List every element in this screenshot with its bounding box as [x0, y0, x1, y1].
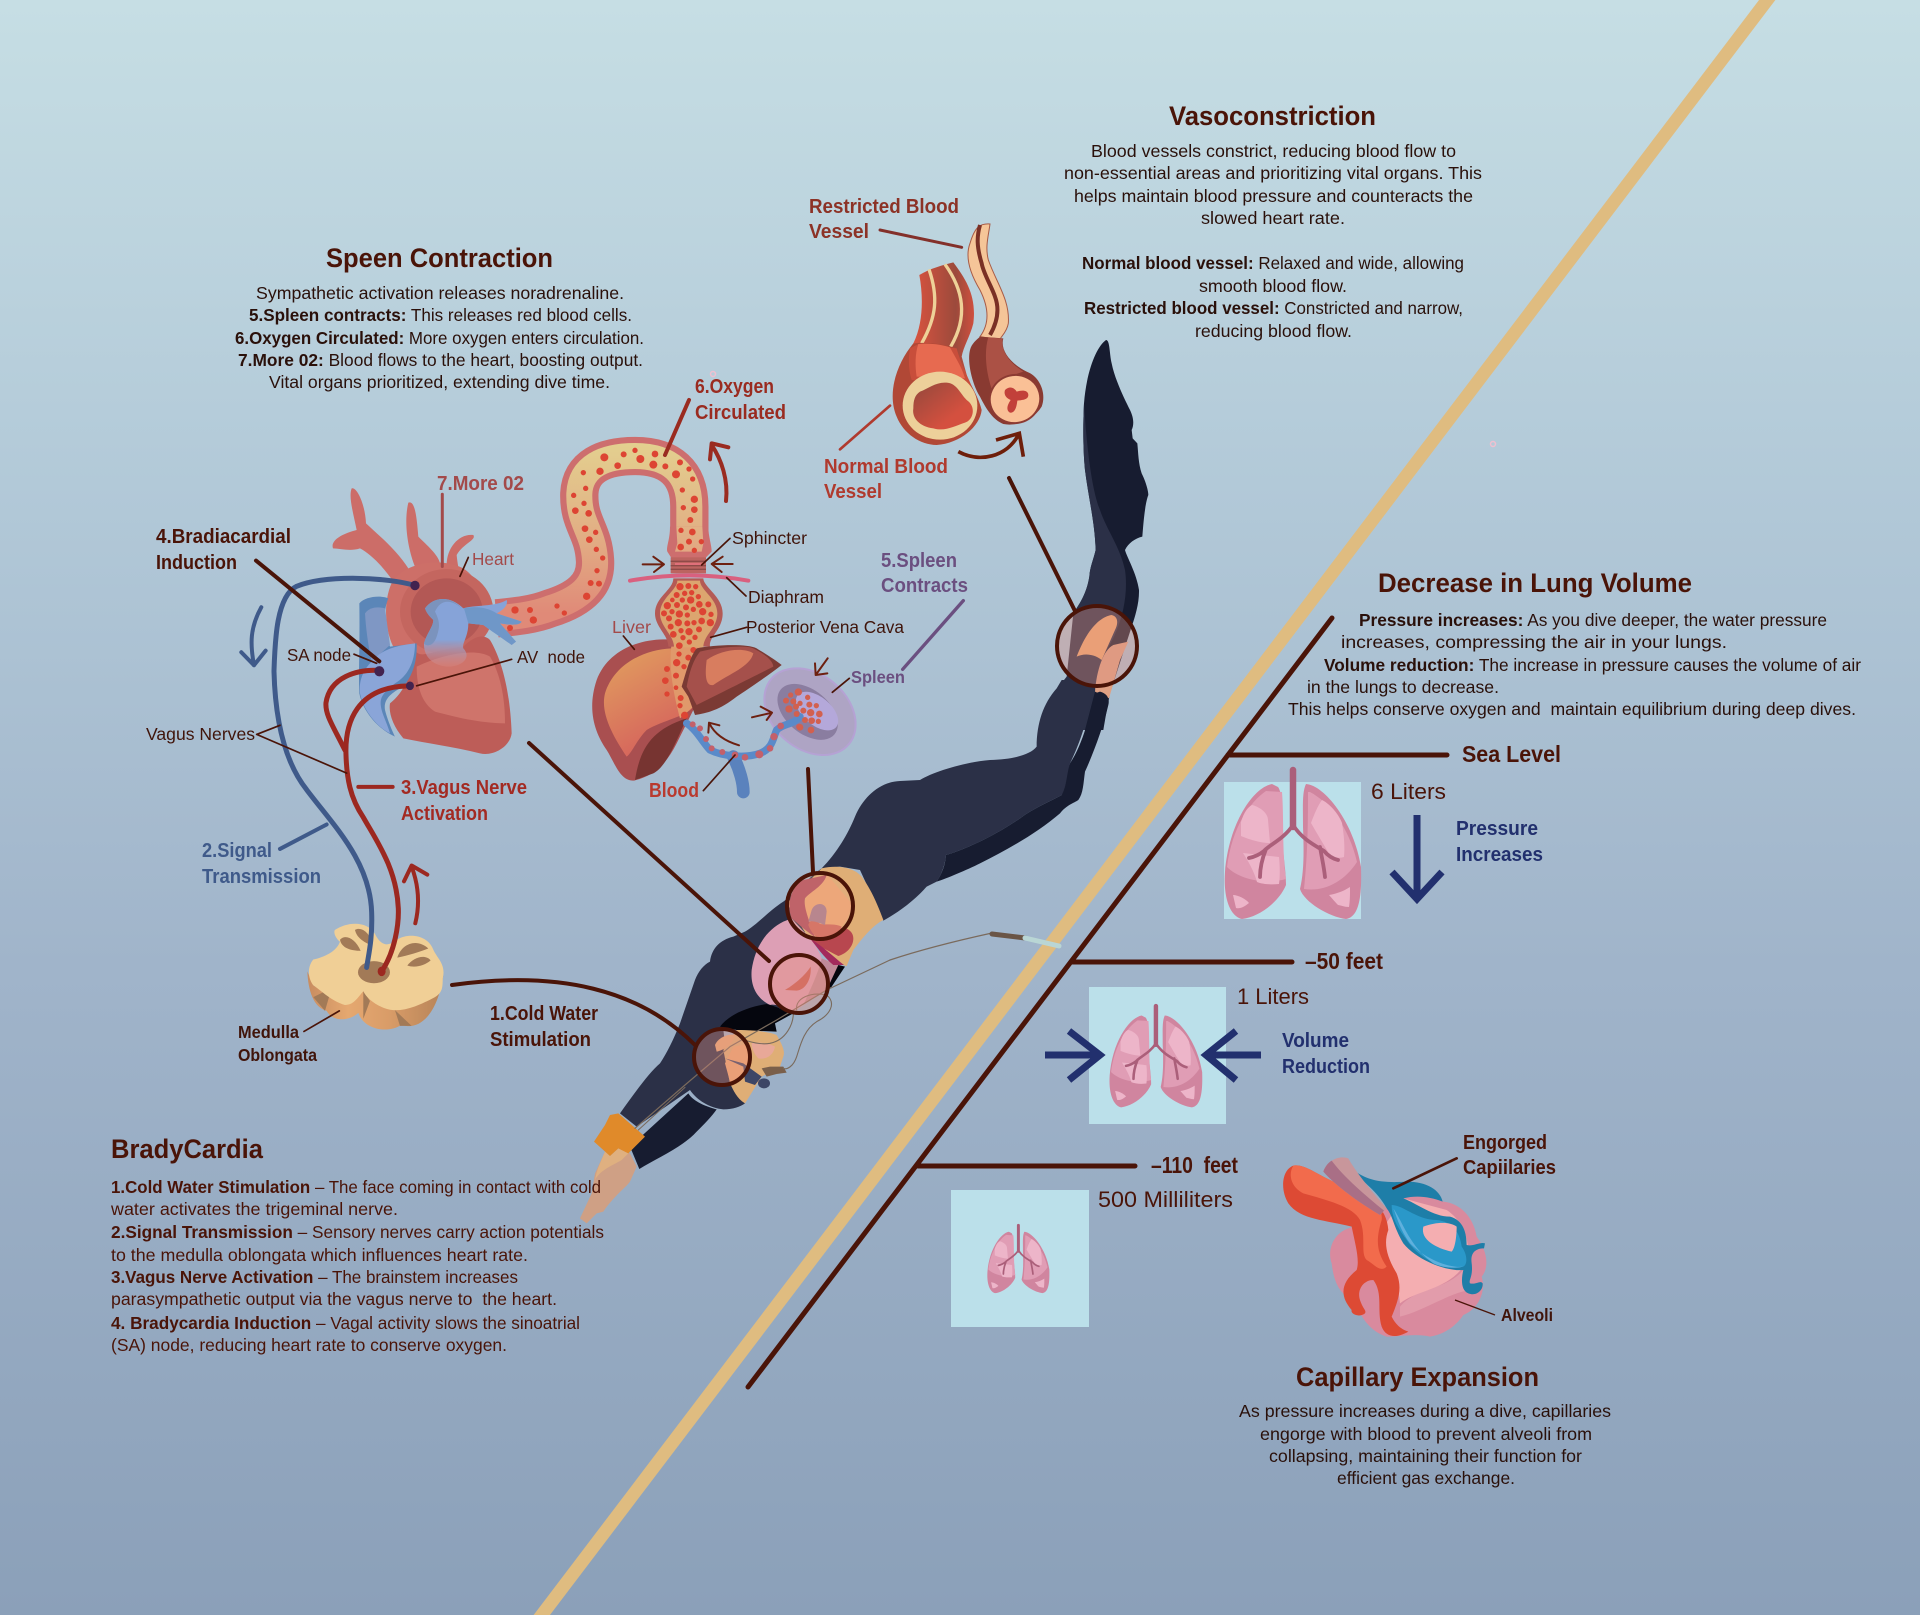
labels: spleen diagram: Blood: [649, 780, 699, 802]
heading: Capillary Expansion: Capillary Expansion: [1296, 1362, 1539, 1392]
spleen leaders and arrows: [623, 400, 963, 791]
hoses: [635, 960, 890, 1128]
red vagus nerve: [346, 686, 408, 971]
text: lung volume body: This helps conserve oxygen and maintain equilibrium during deep dives.: [1288, 699, 1856, 719]
labels: bradycardia diagram: Stimulation: [490, 1029, 591, 1051]
labels: spleen diagram: Contracts: [881, 575, 968, 597]
red capillary: [1283, 1165, 1408, 1336]
labels: spleen diagram: 6.Oxygen: [695, 376, 774, 398]
labels: bradycardia diagram: [146, 473, 598, 1065]
labels: depth levels: 500 Milliliters: [1098, 1187, 1233, 1212]
text: bradycardia body: 1.Cold Water Stimulation – The face coming in contact with cold: [111, 1177, 601, 1197]
hand: [580, 1148, 637, 1223]
heading: Vasoconstriction: Vasoconstriction: [1169, 101, 1376, 131]
labels: bradycardia diagram: Activation: [401, 803, 488, 825]
text: capillary body: As pressure increases during a dive, capillaries: [1239, 1401, 1611, 1421]
leader lines: [256, 494, 512, 1031]
labels: vessels: Vessel: [809, 221, 869, 243]
labels: bradycardia diagram: 3.Vagus Nerve: [401, 777, 527, 799]
artery flare: [667, 527, 712, 558]
text: bradycardia body: parasympathetic output via the vagus nerve to the heart.: [111, 1289, 557, 1309]
circle: ankle: [1057, 606, 1137, 686]
labels: depth levels: –110 feet: [1151, 1152, 1238, 1178]
labels: spleen diagram: Diaphram: [748, 587, 824, 607]
blue capillary: [1353, 1170, 1485, 1294]
labels: spleen diagram: Liver: [612, 617, 651, 637]
normal vessel front: [893, 343, 982, 445]
labels: depth levels: Pressure: [1456, 818, 1538, 840]
text: lung volume body: increases, compressing the air in your lungs.: [1341, 632, 1727, 652]
labels: bradycardia diagram: Transmission: [202, 866, 321, 888]
labels: vessels: [809, 196, 959, 503]
labels: bradycardia diagram: Oblongata: [238, 1045, 317, 1065]
medulla oblongata: [307, 924, 444, 1030]
labels: spleen diagram: Circulated: [695, 402, 786, 424]
labels: depth levels: Increases: [1456, 844, 1543, 866]
restricted vessel lower: [969, 337, 1043, 425]
fin and lower leg: [1039, 340, 1148, 730]
alveoli and capillaries: [1283, 1157, 1495, 1337]
lower arm: [630, 1093, 717, 1169]
circle: spleen: [787, 873, 853, 939]
labels: alveoli: Engorged: [1463, 1132, 1547, 1154]
pale vessel: [1323, 1157, 1387, 1215]
text: capillary body: collapsing, maintaining their function for: [1269, 1446, 1582, 1466]
black hood: [720, 1004, 793, 1032]
text: bradycardia body: water activates the trigeminal nerve.: [110, 1199, 398, 1219]
regulator: [725, 1058, 762, 1085]
text: spleen contraction body: 6.Oxygen Circulated: More oxygen enters circulation.: [235, 328, 644, 348]
labels: bradycardia diagram: AV node: [517, 647, 585, 667]
normal lumen ring: [903, 372, 977, 440]
text: bradycardia body: (SA) node, reducing heart rate to conserve oxygen.: [111, 1335, 507, 1355]
labels: depth levels: Sea Level: [1462, 741, 1561, 767]
nodes: [374, 581, 420, 690]
lungs 110 feet: [951, 1190, 1089, 1327]
lung area: [751, 918, 839, 1012]
diagonal water surface band: [538, 0, 1771, 1615]
labels: depth levels: 1 Liters: [1237, 984, 1309, 1009]
blue signal nerve: [274, 578, 415, 967]
blood cells: [690, 721, 802, 761]
heading: BradyCardia: BradyCardia: [111, 1134, 264, 1164]
tan torso band: [787, 867, 883, 966]
arrow: up: [404, 866, 427, 923]
labels: depth levels: [1098, 741, 1561, 1212]
vena cava bulb: [655, 578, 723, 647]
restricted lumen: [984, 369, 1046, 429]
organs: [805, 874, 852, 938]
labels: spleen diagram: Posterior Vena Cava: [746, 617, 904, 637]
labels: bradycardia diagram: Medulla: [238, 1022, 299, 1042]
text: vasoconstriction body: reducing blood flow.: [1195, 321, 1352, 341]
labels: spleen diagram: Sphincter: [732, 528, 807, 548]
labels: alveoli: [1463, 1132, 1556, 1325]
text: capillary body: efficient gas exchange.: [1337, 1468, 1515, 1488]
thigh: [822, 680, 1109, 921]
text: vasoconstriction body: non-essential areas and prioritizing vital organs. This: [1064, 163, 1482, 183]
circle: heart: [770, 955, 828, 1013]
text: spleen contraction body: Sympathetic activation releases noradrenaline.: [256, 283, 624, 303]
text: lung volume body: [1288, 610, 1861, 719]
text: bradycardia body: 3.Vagus Nerve Activation – The brainstem increases: [111, 1267, 518, 1287]
right atrium: [359, 597, 417, 737]
bradycardia diagram: [241, 494, 512, 1031]
text: lung volume body: Pressure increases: As you dive deeper, the water pressure: [1359, 610, 1827, 630]
heart: [333, 488, 522, 754]
snorkel: [890, 933, 1059, 960]
head: [723, 1030, 784, 1103]
alveolar sac: [1330, 1194, 1486, 1337]
left liver lobe: [592, 639, 700, 781]
labels: alveoli: Capiilaries: [1463, 1157, 1556, 1179]
arrow: down: [241, 607, 266, 665]
vessel illustration: [840, 224, 1046, 457]
text: bradycardia body: [110, 1177, 604, 1355]
text: vasoconstriction body: Normal blood vessel: Relaxed and wide, allowing: [1082, 253, 1464, 273]
labels: bradycardia diagram: 2.Signal: [202, 840, 272, 862]
labels: spleen diagram: [612, 376, 968, 802]
labels: alveoli: Alveoli: [1501, 1305, 1553, 1325]
text: spleen contraction body: [235, 283, 644, 392]
text: vasoconstriction body: helps maintain blood pressure and counteracts the: [1074, 186, 1473, 206]
restricted vessel upper: [968, 224, 1008, 340]
labels: depth levels: Reduction: [1282, 1056, 1370, 1078]
circle: face: [694, 1029, 750, 1085]
text: bradycardia body: 4. Bradycardia Induction – Vagal activity slows the sinoatrial: [111, 1313, 580, 1333]
volume reduction arrows: [1045, 1031, 1261, 1080]
vena cava column: [671, 643, 703, 718]
text: spleen contraction body: 5.Spleen contracts: This releases red blood cells.: [249, 305, 632, 325]
sphincter: [671, 557, 706, 573]
torso, head and arm: [580, 867, 890, 1223]
heart vessels: [333, 488, 474, 582]
text: vasoconstriction body: Blood vessels constrict, reducing blood flow to: [1091, 141, 1456, 161]
labels: bradycardia diagram: Vagus Nerves: [146, 724, 255, 744]
ventricles: [390, 637, 512, 754]
labels: bradycardia diagram: SA node: [287, 645, 351, 665]
text: spleen contraction body: 7.More 02: Blood flows to the heart, boosting output.: [238, 350, 643, 370]
labels: spleen diagram: 5.Spleen: [881, 550, 957, 572]
text: bradycardia body: 2.Signal Transmission – Sensory nerves carry action potentials: [111, 1222, 604, 1242]
labels: depth levels: –50 feet: [1305, 948, 1383, 974]
spleen cells: [783, 688, 823, 733]
capillary leaders: [1393, 1158, 1457, 1188]
oxygen dots: [507, 448, 714, 719]
upper heart: [386, 562, 483, 667]
lungs sea level: [1224, 770, 1361, 919]
swimmer: [580, 340, 1148, 1223]
text: lung volume body: in the lungs to decrease.: [1307, 677, 1499, 697]
normal vessel back: [913, 262, 974, 387]
labels: bradycardia diagram: Heart: [472, 549, 514, 569]
heading: Decrease in Lung Volume: Decrease in Lung Volume: [1378, 568, 1692, 598]
text: bradycardia body: to the medulla oblongata which influences heart rate.: [111, 1245, 528, 1265]
heading: Speen Contraction: Speen Contraction: [326, 243, 553, 273]
torso suit: [620, 868, 823, 1127]
text: vasoconstriction body: slowed heart rate.: [1201, 208, 1345, 228]
pulmonary vessels: [424, 599, 522, 667]
magnifier circles: [694, 606, 1137, 1085]
text: vasoconstriction body: [1064, 141, 1482, 341]
diaphragm: [630, 575, 748, 581]
red vagus branch: [326, 670, 380, 750]
right liver lobe: [682, 645, 782, 715]
labels: depth levels: Volume: [1282, 1030, 1349, 1052]
depth scale with level lines: [748, 618, 1447, 1387]
marker dots: [710, 372, 1496, 446]
labels: bradycardia diagram: 4.Bradiacardial: [156, 526, 291, 548]
labels: vessels: Normal Blood: [824, 456, 948, 478]
pointer lines to body: [452, 478, 1075, 1045]
labels: bradycardia diagram: Induction: [156, 552, 237, 574]
text: vasoconstriction body: Restricted blood vessel: Constricted and narrow,: [1084, 298, 1463, 318]
labels: vessels: Vessel: [824, 481, 882, 503]
text: vasoconstriction body: smooth blood flow.: [1199, 276, 1347, 296]
veins: [733, 757, 743, 792]
text: capillary body: engorge with blood to prevent alveoli from: [1260, 1424, 1592, 1444]
labels: vessels: Restricted Blood: [809, 196, 959, 218]
labels: bradycardia diagram: 7.More 02: [437, 473, 524, 495]
lungs 50 feet: [1089, 987, 1226, 1124]
spleen contraction diagram: [497, 400, 963, 792]
text: capillary body: [1239, 1401, 1611, 1488]
labels: bradycardia diagram: 1.Cold Water: [490, 1003, 598, 1025]
heart wedge: [785, 967, 811, 991]
text: lung volume body: Volume reduction: The increase in pressure causes the volume of air: [1324, 655, 1861, 675]
pressure arrow: [1392, 815, 1442, 899]
wrist strap: [594, 1113, 645, 1156]
text: spleen contraction body: Vital organs prioritized, extending dive time.: [269, 372, 610, 392]
labels: spleen diagram: Spleen: [851, 667, 905, 687]
vessel leaders and arrow: [840, 406, 890, 449]
labels: depth levels: 6 Liters: [1371, 779, 1446, 804]
artery tube: [497, 456, 689, 618]
spleen: [747, 650, 873, 773]
